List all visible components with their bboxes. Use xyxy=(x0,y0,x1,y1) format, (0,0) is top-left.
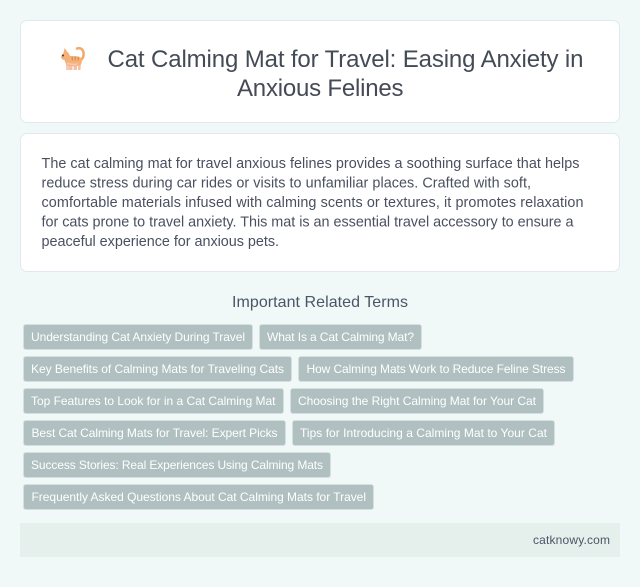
term chip: Frequently Asked Questions About Cat Calming Mats for Travel xyxy=(32,490,366,504)
term chip xyxy=(290,388,544,414)
panel: description xyxy=(20,134,620,272)
term chip xyxy=(260,324,422,350)
term chip: Key Benefits of Calming Mats for Traveling Cats xyxy=(31,362,284,376)
description text: peaceful experience for anxious pets. xyxy=(42,234,279,250)
term chip xyxy=(24,420,286,446)
related terms list xyxy=(24,324,574,510)
term chip xyxy=(24,388,284,414)
term chip: Best Cat Calming Mats for Travel: Expert Picks xyxy=(32,426,278,440)
term chip xyxy=(24,452,330,478)
term chip xyxy=(292,420,554,446)
term chip: Tips for Introducing a Calming Mat to Your Cat xyxy=(300,426,548,440)
title xyxy=(108,46,584,102)
term chip: How Calming Mats Work to Reduce Feline Stress xyxy=(306,362,566,376)
footer site name: catknowy.com xyxy=(533,533,610,547)
term chip xyxy=(24,324,252,350)
term chip: Success Stories: Real Experiences Using Calming Mats xyxy=(31,458,323,472)
term chip: What Is a Cat Calming Mat? xyxy=(267,330,414,344)
description text: for cats prone to travel anxiety. This mat is an essential travel accessory to ensure a xyxy=(42,214,574,230)
description text: The cat calming mat for travel anxious felines provides a soothing surface that helps xyxy=(42,156,580,172)
heading: important related terms: Important Related Terms xyxy=(232,294,408,311)
description text xyxy=(42,156,584,250)
footer xyxy=(20,523,620,557)
icon: cat xyxy=(61,48,84,70)
description text: comfortable materials infused with calming scents or textures, it promotes relaxation xyxy=(42,195,584,211)
description text: reduce stress during car rides or visits to unfamiliar places. Crafted with soft, xyxy=(42,176,531,192)
term chip xyxy=(24,484,374,510)
term chip: Choosing the Right Calming Mat for Your Cat xyxy=(298,394,537,408)
title: Anxious Felines xyxy=(237,75,404,102)
term chip xyxy=(298,356,574,382)
term chip: Top Features to Look for in a Cat Calming Mat xyxy=(31,394,276,408)
term chip: Understanding Cat Anxiety During Travel xyxy=(31,330,245,344)
term chip xyxy=(24,356,292,382)
title: Cat Calming Mat for Travel: Easing Anxiety in xyxy=(108,46,584,73)
header panel xyxy=(20,20,620,122)
